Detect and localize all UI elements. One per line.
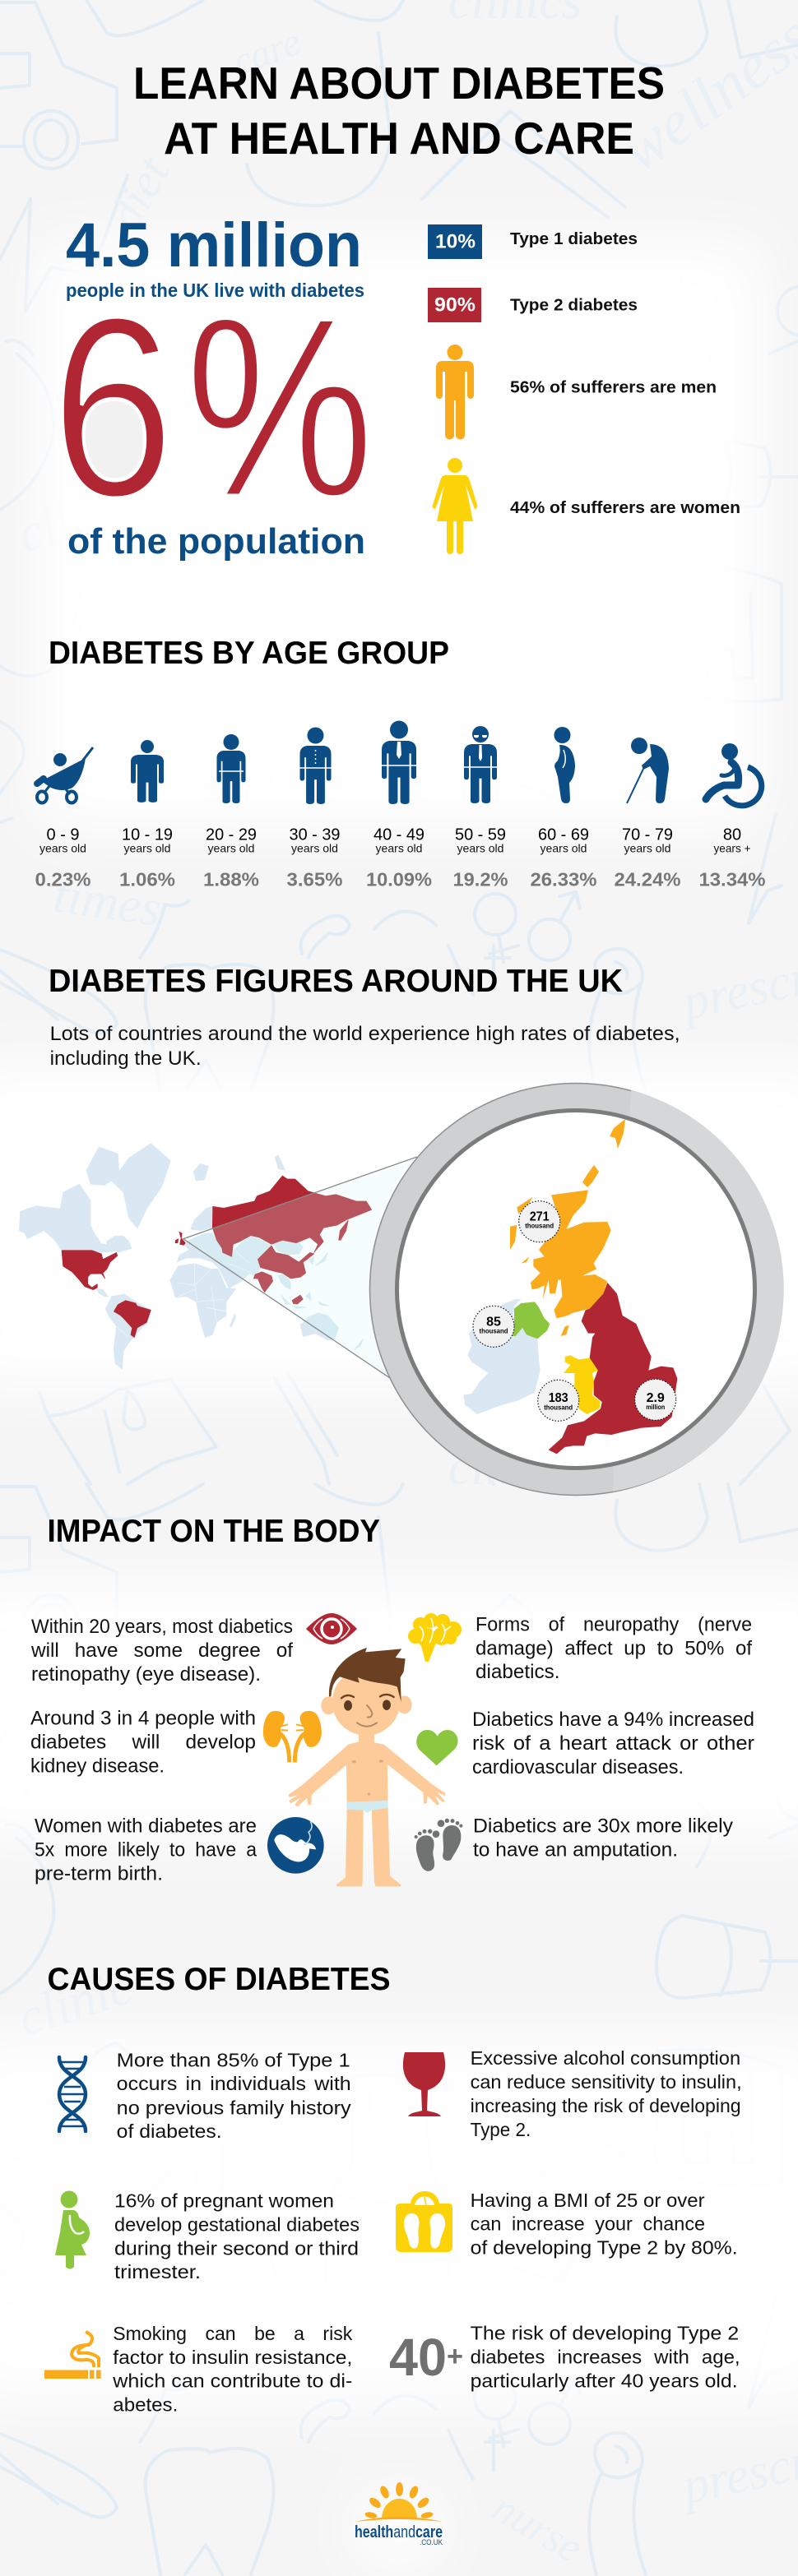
- text block: pre-term birth: [35, 1815, 257, 1885]
- column 50-59: years old: [457, 842, 503, 855]
- cause text: of diabetes.: [117, 2120, 222, 2142]
- column 0-9: [35, 826, 90, 890]
- cause text: [471, 2047, 742, 2140]
- Russia: [212, 1176, 372, 1256]
- text block: neuropathy: diabetics.: [476, 1661, 559, 1683]
- text block: amputation: Diabetics are 30x more likely: [473, 1815, 733, 1837]
- callout: Wales 183 thousand: 183: [549, 1391, 568, 1405]
- cause text: [114, 2190, 360, 2282]
- icon: age 20-29: [217, 734, 245, 803]
- cause text: can reduce sensitivity to insulin,: [471, 2071, 742, 2093]
- region: Ireland: [463, 1299, 541, 1414]
- text block: neuropathy: damage) affect up to 50% of: [476, 1637, 752, 1659]
- text block: neuropathy: Forms of neuropathy (nerve: [476, 1613, 752, 1635]
- cause text: which can contribute to di-: [112, 2370, 352, 2391]
- column 70-79: 70 - 79: [622, 826, 673, 844]
- cause text: [112, 2323, 353, 2416]
- badge 90 percent: 90%: [434, 294, 476, 316]
- title: AT HEALTH AND CARE: [164, 113, 634, 164]
- cause: gestational: [55, 2190, 360, 2282]
- column 10-19: [119, 826, 175, 890]
- icon: DNA helix: [59, 2057, 86, 2131]
- callout: Northern Ireland 85 thousand: 85: [486, 1315, 501, 1329]
- cause text: Excessive alcohol consumption: [471, 2047, 740, 2069]
- column 80 plus: 80: [723, 826, 741, 844]
- USA and Mexico: [62, 1251, 118, 1290]
- type 1 label: Type 1 diabetes: [510, 230, 638, 248]
- region: Scotland: [510, 1119, 625, 1336]
- column 0-9: 0.23%: [35, 869, 90, 890]
- logo wordmark: healthandcare: [355, 2523, 443, 2541]
- cause text: diabetes increases with age,: [471, 2347, 740, 2368]
- text block: pre-term birth: Women with diabetes are: [35, 1815, 257, 1838]
- column 10-19: 10 - 19: [122, 826, 173, 844]
- world map: [19, 1144, 372, 1369]
- column 80 plus: years +: [714, 842, 750, 855]
- column 40-49: years old: [375, 842, 423, 855]
- callout: Scotland 271 thousand: thousand: [525, 1221, 554, 1229]
- type 2 label: Type 2 diabetes: [510, 296, 638, 314]
- British Isles: [175, 1232, 185, 1245]
- icon: brain: [408, 1613, 462, 1662]
- callout: Scotland 271 thousand: 271: [530, 1209, 550, 1223]
- column 50-59: 50 - 59: [455, 826, 506, 844]
- callout: Wales 183 thousand: thousand: [544, 1404, 573, 1412]
- cause text: can increase your chance: [471, 2213, 705, 2235]
- cause text: occurs in individuals with: [117, 2073, 351, 2094]
- badge 90 percent: [428, 288, 481, 322]
- cause text: factor to insulin resistance,: [113, 2347, 352, 2368]
- text block: retinopathy: [30, 1616, 293, 1686]
- big 6 percent: %: [185, 265, 374, 551]
- icon: kidneys: [263, 1711, 322, 1762]
- cause text: abetes.: [113, 2394, 178, 2416]
- magnifier lens: [370, 1084, 784, 1495]
- cause text: More than 85% of Type 1: [117, 2049, 350, 2070]
- icon: pregnant woman: [55, 2190, 90, 2269]
- cause text: [471, 2190, 738, 2258]
- page background: nurse: [485, 2484, 591, 2572]
- icon: eye: [306, 1613, 357, 1644]
- text block: heart: cardiovascular diseases.: [472, 1756, 684, 1778]
- heading: causes of diabetes: CAUSES OF DIABETES: [48, 1962, 390, 1997]
- icon: 40 plus: 40: [389, 2328, 447, 2387]
- cause: BMI: [396, 2190, 738, 2258]
- column 50-59: 19.2%: [452, 869, 508, 890]
- page background: diet: [97, 148, 180, 239]
- column 10-19: 1.06%: [119, 869, 175, 890]
- column 60-69: [530, 826, 597, 890]
- cause text: [471, 2322, 740, 2391]
- column 80 plus: [699, 826, 765, 890]
- column 70-79: [614, 826, 681, 890]
- column 40-49: 10.09%: [366, 869, 432, 890]
- page background: clinics: [448, 1440, 582, 1496]
- China: [257, 1246, 314, 1279]
- heading: figures around the UK: DIABETES FIGURES AROUND THE UK: [49, 964, 623, 999]
- cause text: Smoking can be a risk: [113, 2323, 353, 2344]
- callout: Scotland 271 thousand: [519, 1201, 560, 1242]
- column 0-9: years old: [39, 842, 86, 855]
- text block: neuropathy: [476, 1613, 752, 1683]
- panel: type and gender split: [428, 224, 740, 554]
- logo domain: .CO.UK: [420, 2538, 443, 2546]
- text block: amputation: [473, 1815, 733, 1861]
- column 40-49: 40 - 49: [373, 826, 425, 844]
- icon: age 80 plus wheelchair: [706, 743, 762, 806]
- icon: age 40-49: [382, 720, 416, 804]
- cause: alcohol: [403, 2047, 742, 2140]
- counter of the 6: [77, 399, 149, 481]
- cause text: Type 2.: [471, 2119, 531, 2140]
- cause text: no previous family history: [117, 2097, 351, 2118]
- icon: boy body: [289, 1648, 446, 1886]
- icon: fetus: [267, 1817, 324, 1874]
- cause text: trimester.: [114, 2261, 201, 2282]
- cause text: of developing Type 2 by 80%.: [471, 2236, 738, 2258]
- icon: 40 plus: +: [447, 2341, 463, 2372]
- text block: kidney: diabetes will develop: [30, 1732, 256, 1754]
- cause text: Having a BMI of 25 or over: [471, 2190, 705, 2211]
- column 70-79: years old: [624, 842, 671, 855]
- title: [133, 58, 665, 164]
- text block: heart: risk of a heart attack or other: [472, 1732, 754, 1755]
- callout: Northern Ireland 85 thousand: thousand: [479, 1327, 508, 1335]
- column 60-69: 26.33%: [530, 869, 597, 890]
- big 6 percent: 6: [51, 265, 174, 551]
- column 20-29: [203, 826, 259, 890]
- icon: cigarette: [44, 2332, 100, 2379]
- region: Wales: [564, 1355, 601, 1414]
- icon: sun: [355, 2482, 443, 2522]
- title: LEARN ABOUT DIABETES: [133, 58, 665, 109]
- icon: woman: [433, 458, 477, 554]
- page background: care: [227, 20, 306, 84]
- big number 4.5 million: 4.5 million: [66, 210, 362, 280]
- text block: kidney: Around 3 in 4 people with: [30, 1708, 256, 1730]
- cause text: 16% of pregnant women: [114, 2190, 334, 2212]
- panel: age labels and percentages: [35, 826, 765, 890]
- India: [253, 1272, 273, 1293]
- column 40-49: [366, 826, 432, 890]
- of the population: of the population: [67, 521, 365, 562]
- region: Northern Ireland: [512, 1302, 550, 1339]
- icon: man: [436, 345, 474, 439]
- cause text: The risk of developing Type 2: [471, 2322, 739, 2343]
- callout: England 2.9 million: 2.9: [647, 1391, 665, 1405]
- text block: retinopathy: retinopathy (eye disease).: [31, 1663, 261, 1686]
- icon: wine glass: [403, 2052, 445, 2116]
- column 70-79: 24.24%: [614, 869, 681, 890]
- icon: stroller: [32, 747, 95, 802]
- column 10-19: years old: [123, 842, 171, 855]
- intro paragraph: [50, 1023, 680, 1070]
- callout: Northern Ireland 85 thousand: [473, 1306, 514, 1347]
- region: England: [549, 1283, 677, 1454]
- text block: amputation: to have an amputation.: [473, 1838, 678, 1861]
- column 30-39: 30 - 39: [290, 826, 341, 844]
- callout: England 2.9 million: million: [646, 1403, 665, 1411]
- column 60-69: 60 - 69: [538, 826, 589, 844]
- subheading: people in the UK live with diabetes: [66, 280, 364, 301]
- women label: 44% of sufferers are women: [510, 499, 740, 517]
- panel: headline statistic: [51, 210, 374, 562]
- text block: heart: Diabetics have a 94% increased: [472, 1709, 754, 1731]
- icon: age 70-79: [627, 738, 669, 803]
- icon: age 60-69: [554, 727, 575, 803]
- magnifier cone: [183, 1157, 417, 1379]
- cause: age: [389, 2322, 740, 2391]
- men label: 56% of sufferers are men: [510, 378, 717, 396]
- page background: times: [50, 867, 165, 937]
- icon: age 50-59: [464, 726, 497, 803]
- badge 10 percent: 10%: [435, 230, 476, 253]
- icon: weighing scale: [396, 2191, 452, 2252]
- column 30-39: years old: [291, 842, 338, 855]
- column 50-59: [452, 826, 508, 890]
- Malaysia: [292, 1295, 303, 1304]
- text block: retinopathy: will have some degree of: [30, 1639, 293, 1662]
- intro paragraph: Lots of countries around the world experience high rates of diabetes,: [50, 1023, 680, 1045]
- text block: kidney: kidney disease.: [30, 1755, 165, 1777]
- text block: heart: [472, 1709, 754, 1778]
- text block: retinopathy: Within 20 years, most diabetics: [31, 1616, 293, 1638]
- cause text: develop gestational diabetes: [114, 2213, 360, 2235]
- big 6 percent: [51, 265, 374, 551]
- column 0-9: 0 - 9: [46, 826, 80, 844]
- column 60-69: years old: [540, 842, 587, 855]
- intro paragraph: including the UK.: [50, 1048, 202, 1070]
- column 20-29: 20 - 29: [206, 826, 257, 844]
- column 30-39: 3.65%: [286, 869, 342, 890]
- icon: heart: [416, 1730, 458, 1765]
- panel: age group figures: [32, 720, 762, 806]
- icon: age 10-19: [131, 740, 164, 802]
- cause text: particularly after 40 years old.: [471, 2370, 738, 2391]
- cause: family history: [59, 2049, 351, 2142]
- column 80 plus: 13.34%: [699, 869, 765, 890]
- heading: impact on the body: IMPACT ON THE BODY: [48, 1514, 380, 1549]
- cause text: increasing the risk of developing: [471, 2095, 741, 2116]
- UK map: [463, 1119, 677, 1454]
- page background: clinic: [10, 472, 140, 563]
- icon: footprints: [415, 1819, 462, 1871]
- page background: clinic: [10, 1956, 140, 2047]
- callout: Wales 183 thousand: [538, 1380, 579, 1421]
- badge 10 percent: [428, 224, 482, 259]
- text block: pre-term birth: pre-term birth.: [35, 1862, 163, 1885]
- Brazil: [114, 1301, 151, 1338]
- column 20-29: years old: [207, 842, 255, 855]
- text block: pre-term birth: 5x more likely to have a: [35, 1839, 257, 1861]
- callout: England 2.9 million: [635, 1379, 676, 1420]
- cause text: [117, 2049, 351, 2142]
- column 30-39: [286, 826, 342, 890]
- heading: age group: DIABETES BY AGE GROUP: [49, 636, 449, 671]
- cause text: during their second or third: [114, 2238, 359, 2259]
- icon: age 30-39: [299, 727, 332, 804]
- logo: [355, 2482, 443, 2546]
- text block: kidney: [30, 1708, 256, 1777]
- column 20-29: 1.88%: [203, 869, 259, 890]
- cause: smoking: [44, 2323, 353, 2416]
